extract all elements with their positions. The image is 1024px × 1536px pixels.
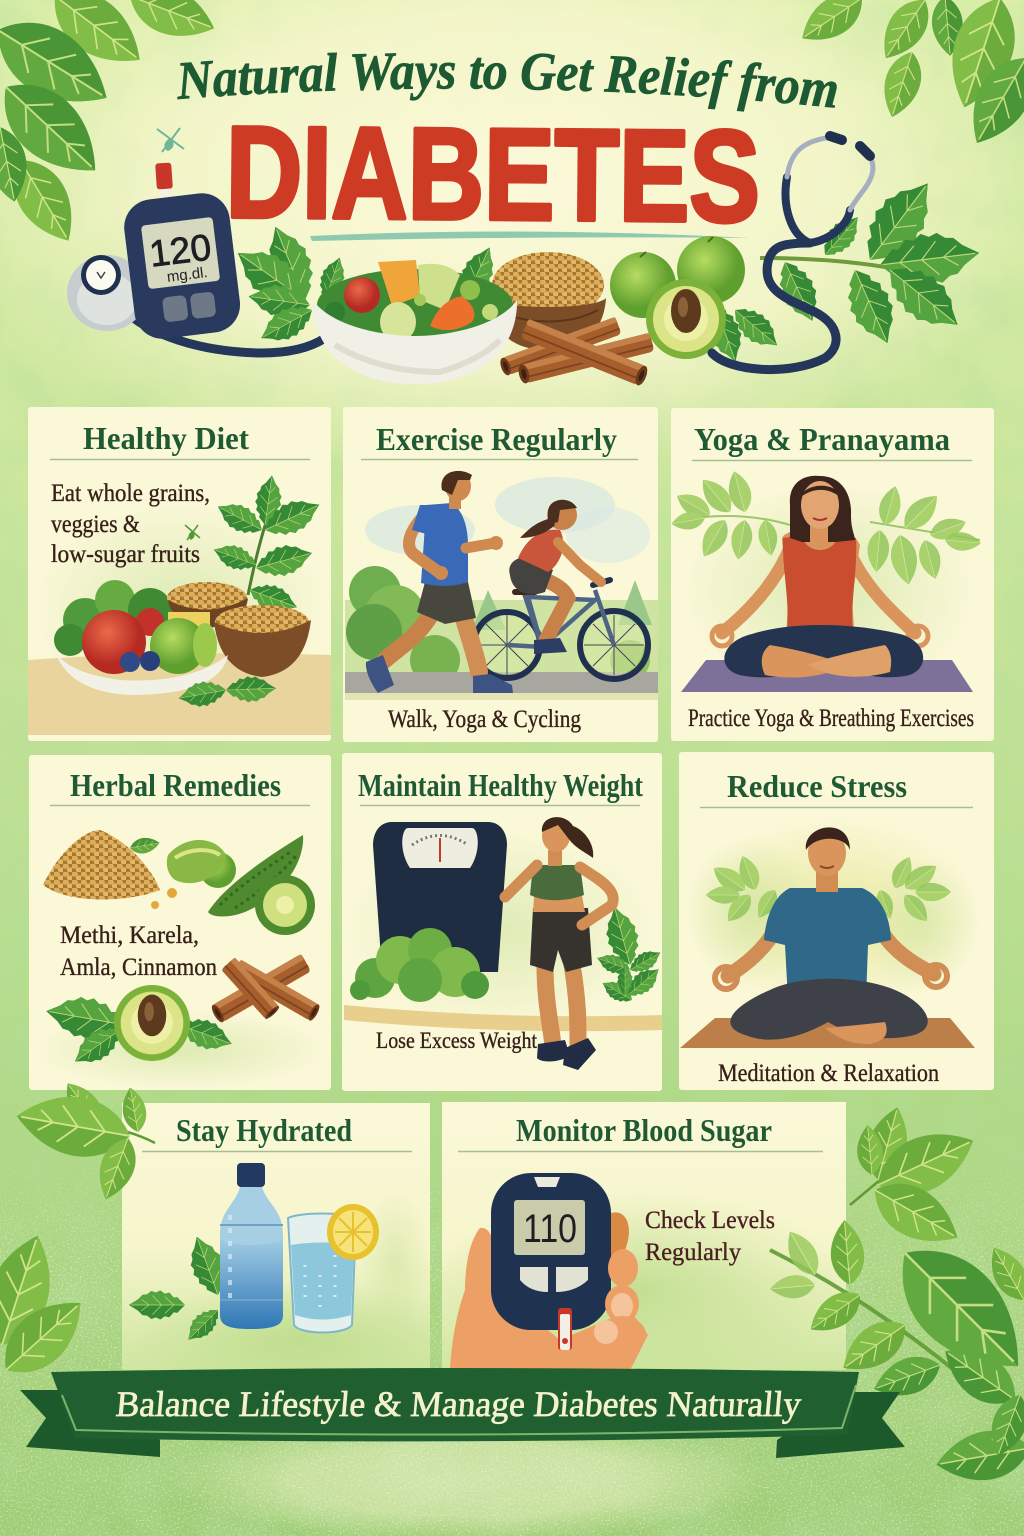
small sprig near meter [157, 128, 184, 152]
panel: Exercise Regularly [343, 407, 658, 742]
hero illustration: amla fruits [610, 236, 786, 367]
icon: meter reading 110: 110 [523, 1207, 577, 1251]
icon: weighing scale [373, 822, 507, 972]
icon: lemon slice [327, 1204, 379, 1260]
yoga mat [680, 1018, 975, 1048]
hero illustration: cinnamon sticks [498, 317, 654, 387]
text: whole grains: veggies & [51, 511, 140, 538]
icon: amla halves and bitter gourd [129, 835, 315, 935]
text: herb names: Amla, Cinnamon [60, 954, 217, 981]
text: herb names [60, 922, 217, 981]
title: DIABETES: DIABETES [225, 99, 761, 249]
panel: Yoga & Pranayama [670, 408, 994, 741]
brush stroke under title [310, 231, 750, 241]
icon: cinnamon sticks [210, 954, 321, 1024]
hero illustration: test strip [155, 163, 175, 214]
text: check levels [645, 1207, 775, 1266]
illustration: woman meditating [712, 476, 928, 678]
side leaves: bottom left lower sprig [0, 1227, 97, 1389]
corner leaves: top right [792, 0, 1024, 155]
yoga mat [681, 660, 973, 692]
hero illustration: neem leaves behind bowl [226, 219, 351, 351]
title: Natural Ways to Get Relief from: Natural Ways to Get Relief from [177, 52, 837, 112]
panel: Herbal Remedies [29, 755, 331, 1090]
text: herb names: Methi, Karela, [60, 922, 199, 949]
panel: Stay Hydrated [122, 1103, 470, 1400]
illustration: woman with scale [505, 817, 613, 1070]
illustration: runner [366, 471, 513, 693]
heading: Healthy Diet: Healthy Diet [83, 420, 249, 456]
heading: Stay Hydrated: Stay Hydrated [176, 1112, 352, 1148]
panel: Maintain Healthy Weight [340, 753, 665, 1091]
corner leaves: top left [0, 0, 222, 253]
heading: Herbal Remedies: Herbal Remedies [70, 767, 281, 803]
icon: cut amla with leaves [43, 985, 237, 1073]
panel: Reduce Stress [679, 752, 994, 1090]
icon: fruit plate and grains [53, 580, 311, 711]
illustration: leaf sprigs [706, 853, 951, 927]
illustration: hand holding meter [450, 1173, 648, 1370]
icon: plants right [594, 903, 665, 1008]
heading: Maintain Healthy Weight: Maintain Healthy Weight [358, 767, 643, 803]
text: check levels: Regularly [645, 1239, 741, 1266]
icon: leaves [129, 1231, 233, 1347]
panel: Healthy Diet [28, 407, 331, 741]
heading: Reduce Stress: Reduce Stress [727, 768, 907, 804]
icon: fenugreek seed pile [43, 830, 160, 900]
text: check levels: Check Levels [645, 1207, 775, 1234]
icon: glass of water [288, 1214, 356, 1332]
illustration: leaf sprigs [670, 469, 982, 586]
illustration: man meditating [715, 827, 947, 1044]
text: whole grains [51, 480, 210, 568]
illustration: cyclist on bike [474, 500, 648, 679]
panel: Monitor Blood Sugar [430, 1102, 850, 1390]
side leaves: bottom left upper sprig [12, 1075, 155, 1205]
caption: Lose Excess Weight: Lose Excess Weight [376, 1028, 538, 1053]
hero illustration: grain bowl [490, 252, 606, 350]
scene: park background [345, 477, 658, 700]
ground band [28, 653, 331, 735]
heading: Exercise Regularly: Exercise Regularly [376, 421, 617, 457]
hero illustration: neem branch right [760, 168, 982, 352]
side leaves: right upper sprig [850, 1103, 984, 1258]
icon: water bottle [220, 1163, 283, 1329]
heading: Monitor Blood Sugar: Monitor Blood Sugar [516, 1112, 772, 1148]
hero illustration: glucose meter reading 120: mg.dl. [166, 264, 209, 286]
icon: meter reading 110 [491, 1173, 611, 1350]
hero illustration: glucose meter reading 120: 120 [147, 226, 213, 275]
side leaves: right lower branch [769, 1219, 1024, 1488]
text: whole grains: Eat whole grains, [51, 480, 210, 507]
heading: Yoga & Pranayama: Yoga & Pranayama [694, 421, 950, 457]
caption: Meditation & Relaxation: Meditation & Relaxation [718, 1060, 939, 1087]
caption: Walk, Yoga & Cycling: Walk, Yoga & Cycling [388, 706, 581, 733]
icon: leafy greens [350, 928, 489, 1002]
icon: neem sprig [210, 474, 326, 619]
hero illustration: stethoscope chestpiece and tube [67, 255, 325, 353]
hero illustration: glucose meter reading 120 [121, 190, 243, 342]
text: whole grains: low-sugar fruits [51, 541, 200, 568]
icon: tiny sprig [185, 525, 200, 540]
hero illustration: stethoscope right [712, 136, 873, 370]
footer ribbon banner [20, 1368, 905, 1458]
banner text: Balance Lifestyle & Manage Diabetes Naturally [114, 1384, 803, 1424]
hero illustration: salad bowl [313, 241, 517, 384]
